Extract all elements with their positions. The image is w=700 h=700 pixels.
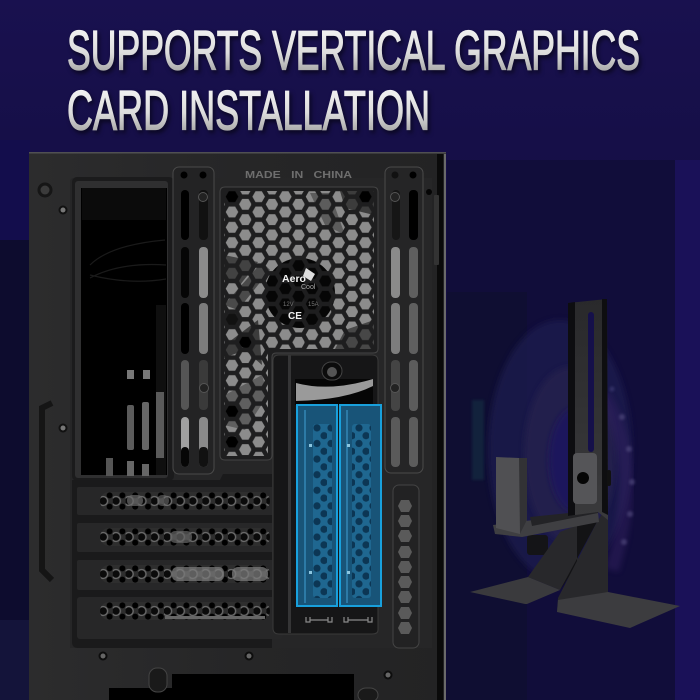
left slotted bar: [173, 167, 214, 474]
fan seen through hex holes: [220, 187, 380, 462]
highlighted slot covers: [297, 405, 381, 606]
vertical GPU bracket product: [470, 299, 680, 628]
PCI slot 3: [77, 560, 283, 590]
bolt: [577, 472, 589, 484]
mounting screw: [58, 424, 68, 432]
fan hub label: 12V: [283, 302, 294, 308]
raised inner panel: [70, 178, 432, 648]
fan hub label: [282, 268, 319, 322]
PSU opening: [109, 668, 378, 700]
rear column: [560, 510, 597, 590]
slot cover right: [340, 405, 381, 606]
right hex vent column: [393, 485, 419, 648]
PCI slot 2: [77, 523, 283, 552]
fan hub label: Aero: [282, 274, 306, 285]
left case handle: [42, 403, 52, 580]
left screw: [38, 182, 52, 198]
case body: [29, 152, 446, 700]
title line 2: CARD INSTALLATION: [67, 78, 430, 142]
fan hub label: Cool: [301, 284, 316, 291]
bracket screw: [322, 362, 342, 380]
window opening: [295, 379, 373, 405]
mounting screw: [58, 206, 68, 214]
right foot upright: [557, 505, 608, 612]
small hole: [426, 189, 432, 195]
PCI slot 1: [77, 487, 283, 515]
right foot plate: [557, 592, 680, 628]
grille frame: [220, 187, 378, 460]
PC case rear panel: [29, 152, 446, 700]
slider plate: [573, 453, 597, 504]
fan hub label: 15A: [308, 302, 319, 308]
vertical GPU bracket window: [273, 355, 378, 634]
fan hub label: CE: [288, 311, 302, 322]
post: [568, 299, 608, 520]
tray: [493, 512, 599, 537]
left foot: [528, 525, 578, 590]
background: ghost fan behind bracket: [472, 320, 635, 580]
PCI slot 4: [77, 597, 283, 639]
case right edge with hinge: [434, 154, 446, 700]
rear opening: [72, 177, 174, 481]
PCI slot block: [72, 474, 283, 648]
rear nut: [607, 470, 611, 486]
slot cover latches: [306, 617, 372, 622]
right slotted bar: [385, 167, 423, 473]
post slot: [588, 312, 594, 452]
embossed text: MADE IN CHINA: [245, 169, 352, 181]
clamp box: [496, 457, 527, 534]
fan grille: [220, 187, 380, 462]
lower screws: [98, 652, 392, 680]
slot cover left: [297, 405, 337, 606]
knob under tray: [527, 535, 548, 555]
fan blade through window: [296, 379, 373, 401]
title: [67, 18, 640, 142]
